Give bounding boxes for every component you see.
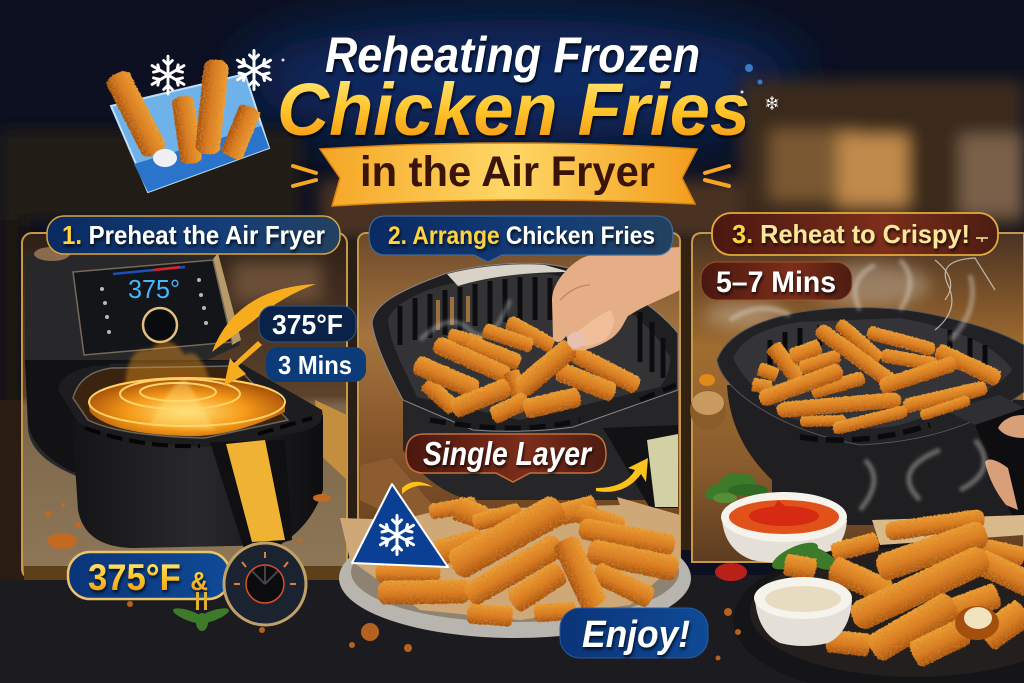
badge: 3 mins: 3 Mins bbox=[278, 350, 352, 380]
fries in basket bbox=[411, 314, 643, 425]
step 2 heading bbox=[369, 216, 673, 262]
black serving plate bbox=[733, 509, 1024, 683]
enjoy label bbox=[560, 608, 708, 658]
step 1 heading: 1. Preheat the Air Fryer bbox=[62, 220, 325, 250]
fryer basket bbox=[58, 360, 323, 548]
parsley bbox=[702, 473, 768, 504]
icon: frozen warning triangle bbox=[352, 484, 448, 567]
temperature badge bbox=[68, 552, 230, 599]
yellow arrow right bbox=[596, 458, 648, 492]
hand bbox=[552, 247, 680, 351]
title line 1: Reheating Frozen bbox=[325, 27, 700, 83]
step 3 heading bbox=[712, 213, 998, 255]
ribbon banner bbox=[320, 143, 697, 206]
step 2 heading: 2. Arrange Chicken Fries bbox=[388, 222, 655, 250]
panel: step 3 reheat bbox=[127, 213, 1024, 683]
basket open bbox=[372, 263, 678, 500]
title line 2: Chicken Fries bbox=[277, 68, 750, 151]
serving plate with fries bbox=[339, 493, 691, 638]
ketchup bowl bbox=[721, 492, 847, 563]
panel: step 1 preheat bbox=[22, 216, 347, 580]
control display bbox=[73, 260, 232, 355]
steam bbox=[420, 300, 510, 340]
control display: 375° bbox=[128, 274, 180, 304]
garnish leaf bbox=[171, 592, 231, 631]
yellow arrow left bbox=[402, 482, 433, 494]
enjoy label: Enjoy! bbox=[582, 614, 690, 656]
icon: timer dial bbox=[224, 543, 306, 625]
time badge: 5–7 Mins bbox=[716, 266, 836, 299]
panel 1 backdrop bbox=[22, 233, 347, 579]
ribbon banner: in the Air Fryer bbox=[360, 148, 655, 196]
badge: 375F: 375°F bbox=[272, 309, 343, 340]
panel 3 backdrop bbox=[692, 233, 1024, 562]
hand on handle bbox=[985, 415, 1024, 510]
panel: step 2 arrange bbox=[339, 216, 708, 658]
mayo bowl bbox=[754, 577, 852, 646]
flames and heat rings bbox=[88, 341, 285, 436]
gold arrow down bbox=[224, 341, 262, 386]
wooden dish bbox=[690, 374, 726, 430]
steam rising bbox=[730, 260, 985, 510]
steam haze bbox=[705, 263, 930, 329]
cutting board bbox=[315, 400, 347, 480]
gold arrow curve bbox=[212, 284, 316, 352]
single layer label: Single Layer bbox=[423, 435, 593, 472]
snowflake right bbox=[238, 50, 270, 90]
yellow handle bbox=[210, 440, 292, 552]
basket crisp bbox=[717, 308, 1024, 525]
ribbon sparks bbox=[293, 166, 729, 186]
snowflake left bbox=[152, 56, 184, 94]
wood board bbox=[360, 458, 450, 535]
tomato bbox=[715, 563, 747, 581]
single layer label bbox=[406, 434, 606, 482]
blurred shelves bbox=[232, 262, 322, 302]
badge: 375F bbox=[259, 306, 356, 342]
icon: frozen tray bbox=[104, 50, 271, 192]
temperature badge: 375°F & bbox=[88, 557, 208, 598]
handle right bbox=[603, 425, 678, 508]
crumbs on table bbox=[127, 601, 741, 660]
sparkles right bbox=[282, 58, 778, 110]
air fryer body bbox=[25, 247, 241, 478]
panel 2 backdrop bbox=[358, 233, 680, 578]
step 3 heading: 3. Reheat to Crispy! bbox=[732, 219, 970, 249]
crumbs bbox=[45, 494, 331, 549]
panel 1 wood lip bbox=[24, 566, 346, 580]
badge: 3 mins bbox=[266, 347, 366, 382]
fries in crisp basket bbox=[751, 317, 1003, 435]
fine steam wisps bbox=[935, 258, 995, 330]
